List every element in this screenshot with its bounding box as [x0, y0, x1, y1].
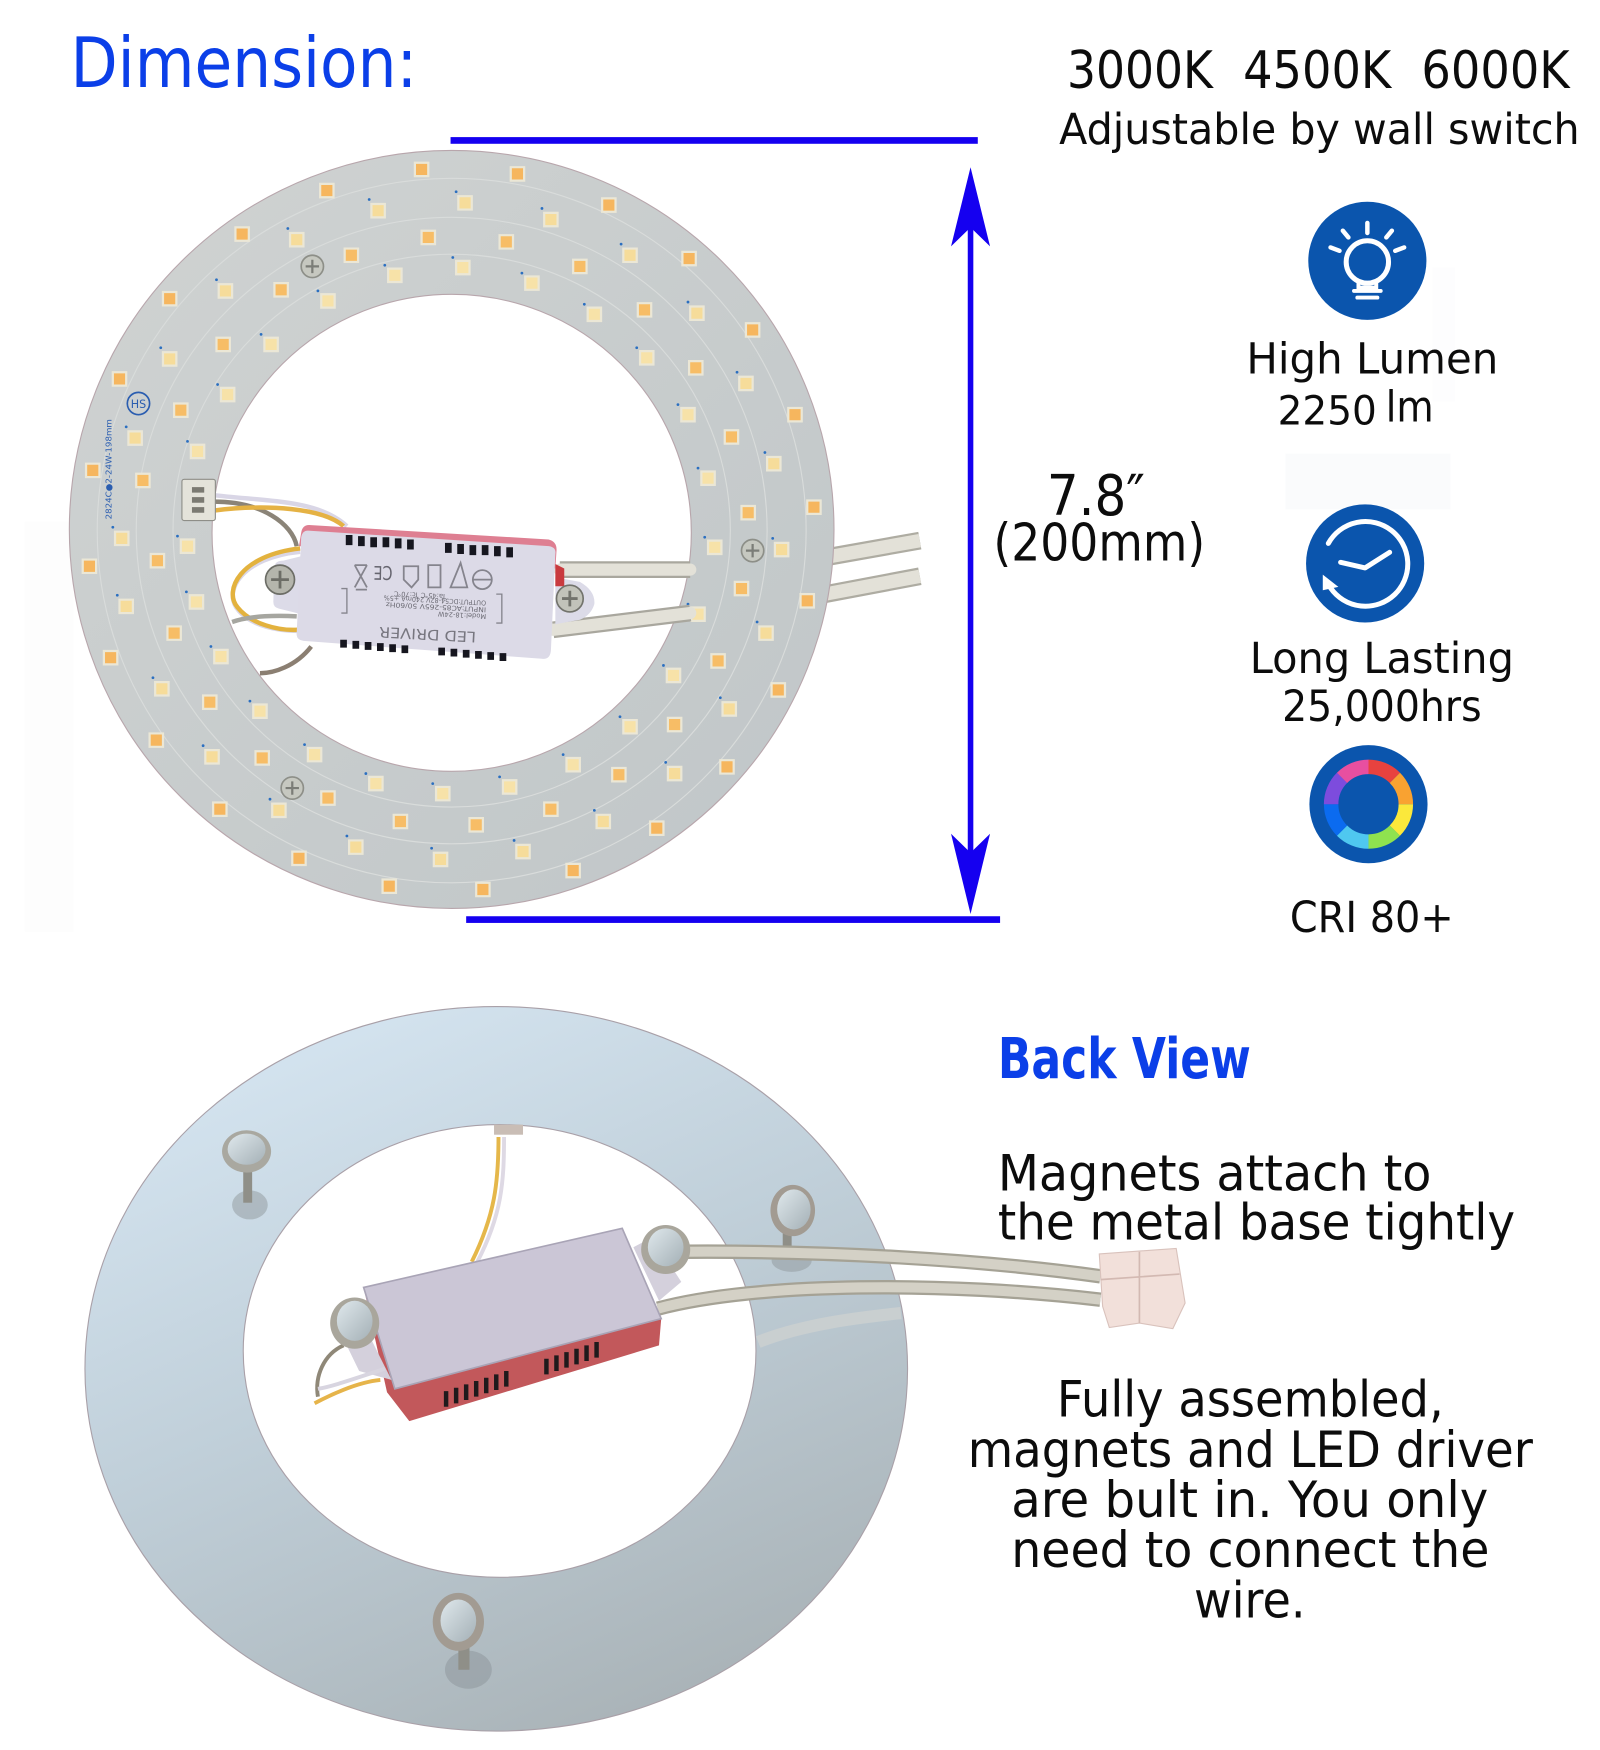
- driver screws: [266, 565, 583, 612]
- dimension label: 7.8″: [1047, 464, 1145, 529]
- driver label: Model:18-24W: [437, 610, 486, 620]
- driver label: [341, 561, 502, 644]
- LED driver: [266, 525, 594, 661]
- feature: CRI: CRI 80+: [1290, 893, 1454, 942]
- feature: long lasting: Long Lasting: [1250, 634, 1514, 683]
- colour temperature options: 4500K: [1243, 41, 1393, 101]
- feature: long lasting: [1250, 504, 1514, 731]
- feature: CRI: [1290, 745, 1454, 942]
- colour temperature options: 6000K: [1421, 41, 1571, 101]
- board markings: 2824C●2-24W-198mm: [104, 419, 114, 519]
- text block: fully assembled: need to connect the: [1011, 1520, 1489, 1579]
- feature: high lumen: 2250: [1278, 389, 1377, 435]
- wiring to driver: [212, 495, 347, 673]
- driver label: Ta:45℃ Tc:70℃: [394, 589, 447, 600]
- board connector: [182, 479, 215, 521]
- title: Dimension: Dimension:: [70, 24, 417, 104]
- driver label: LED DRIVER: [379, 623, 476, 644]
- dimension label: (200mm): [993, 514, 1205, 574]
- driver label: INPUT:AC85-265V 50/60Hz: [385, 600, 486, 613]
- feature: high lumen: High Lumen: [1246, 334, 1498, 383]
- magnets on plate: [222, 1130, 815, 1689]
- text block: magnets: the metal base tightly: [998, 1192, 1515, 1251]
- heading: back view: Back View: [998, 1027, 1251, 1092]
- text block: fully assembled: Fully assembled,: [1057, 1370, 1444, 1429]
- driver vents: [340, 535, 513, 661]
- driver back: [315, 1225, 690, 1421]
- text block: fully assembled: wire.: [1194, 1570, 1305, 1629]
- feature: high lumen: lm: [1386, 382, 1434, 431]
- ring screws: [281, 255, 764, 799]
- colour temperature options: [1059, 41, 1580, 154]
- panel: back view metal plate: [85, 1007, 1185, 1731]
- LED chips: [89, 169, 814, 889]
- board markings: [104, 392, 150, 519]
- colour temperature options: 3000K: [1067, 41, 1214, 101]
- panel: front LED ring: [69, 150, 920, 908]
- text block: fully assembled: magnets and LED driver: [968, 1420, 1533, 1479]
- icon: colour wheel: [1309, 745, 1428, 863]
- wire shadow on plate: [758, 1313, 901, 1342]
- driver label: OUTPUT:DC54-82V 240mA ±5%: [384, 593, 486, 607]
- text block: magnets: Magnets attach to: [998, 1143, 1431, 1202]
- rear cables outside the ring: [820, 541, 920, 595]
- dimension lines and arrow: [451, 137, 1000, 923]
- back side cables: [658, 1252, 1100, 1309]
- cables from driver: [553, 570, 690, 630]
- driver label: CE: [373, 561, 393, 583]
- wire connector: [1099, 1248, 1185, 1329]
- colour temperature options: Adjustable by wall switch: [1059, 105, 1580, 154]
- board markings: HS: [131, 398, 146, 411]
- ring circuit board: [69, 150, 834, 908]
- icon: light bulb: [1308, 202, 1426, 320]
- text block: fully assembled: [968, 1370, 1533, 1629]
- text block: magnets: [998, 1143, 1515, 1251]
- metal plate: [85, 1007, 908, 1731]
- feature: high lumen: [1246, 202, 1498, 435]
- feature: long lasting: 25,000hrs: [1282, 682, 1482, 731]
- text block: fully assembled: are bult in. You only: [1011, 1470, 1488, 1529]
- dimension label: [993, 464, 1205, 574]
- wires to board connector: [472, 1137, 504, 1262]
- icon: clock: [1306, 504, 1424, 623]
